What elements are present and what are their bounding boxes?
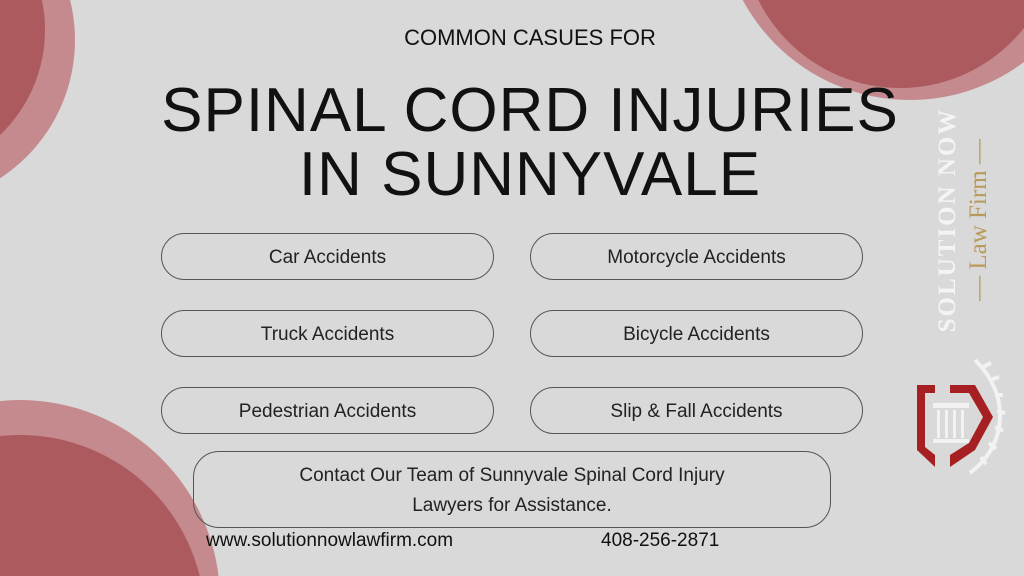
pill: car accidents <box>161 233 494 280</box>
title: IN SUNNYVALE <box>299 140 761 209</box>
pill: pedestrian accidents: Pedestrian Accidents <box>239 400 416 422</box>
pill: slip and fall accidents <box>530 387 863 434</box>
logo text <box>934 108 992 332</box>
pill: motorcycle accidents: Motorcycle Accidents <box>607 246 786 268</box>
website: www.solutionnowlawfirm.com <box>206 530 453 551</box>
pill: truck accidents: Truck Accidents <box>261 324 394 344</box>
contact callout <box>193 451 831 528</box>
pill: slip and fall accidents: Slip & Fall Accidents <box>610 400 783 422</box>
pill: bicycle accidents: Bicycle Accidents <box>623 324 770 344</box>
phone: 408-256-2871 <box>601 530 719 551</box>
pill: truck accidents <box>161 310 494 357</box>
title: SPINAL CORD INJURIES <box>161 76 899 145</box>
pill: motorcycle accidents <box>530 233 863 280</box>
pill: car accidents: Car Accidents <box>269 246 386 268</box>
subtitle: COMMON CASUES FOR <box>404 25 656 50</box>
contact callout: Contact Our Team of Sunnyvale Spinal Cord Injury <box>299 464 725 486</box>
pill: bicycle accidents <box>530 310 863 357</box>
logo text: SOLUTION NOW <box>934 108 961 332</box>
icon: shield logo <box>917 358 1006 474</box>
contact callout: Lawyers for Assistance. <box>412 494 612 516</box>
logo text: — Law Firm — <box>965 139 992 301</box>
pill: pedestrian accidents <box>161 387 494 434</box>
title <box>161 76 899 209</box>
